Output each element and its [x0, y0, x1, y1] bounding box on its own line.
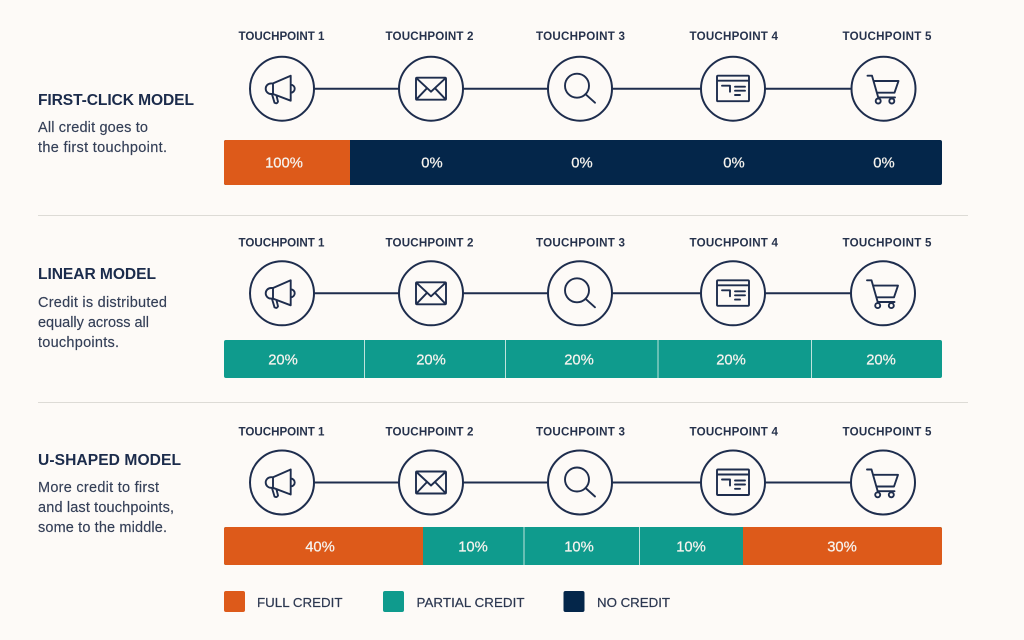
icon: megaphone — [250, 450, 314, 514]
touchpoint labels: TOUCHPOINT 3 — [536, 237, 626, 250]
legend item: partial credit: PARTIAL CREDIT — [416, 595, 524, 610]
icon: envelope — [399, 450, 463, 514]
credit bar: 40/10/10/10/30: 30% — [827, 540, 857, 556]
touchpoint timeline — [250, 57, 916, 121]
credit bar: 20% each: 20% — [416, 352, 446, 368]
touchpoint labels: TOUCHPOINT 3 — [536, 426, 626, 439]
icon: magnifying glass — [548, 261, 612, 325]
credit bar: 20% each — [224, 340, 942, 378]
description: first-click model: the first touchpoint. — [38, 140, 167, 156]
icon: envelope — [399, 57, 463, 121]
heading: u-shaped model: U-SHAPED MODEL — [38, 452, 181, 469]
touchpoint labels: TOUCHPOINT 5 — [842, 237, 932, 250]
touchpoint labels — [238, 30, 932, 43]
credit bar: 100% first touchpoint: 0% — [723, 156, 745, 172]
panel: linear model — [38, 237, 942, 378]
description: first-click model — [38, 120, 167, 156]
description: u-shaped model — [38, 480, 174, 536]
legend item: partial credit — [383, 591, 524, 612]
description: linear model — [38, 295, 167, 351]
icon: shopping cart — [851, 261, 915, 325]
icon: shopping cart — [851, 450, 915, 514]
credit bar: 20% each: 20% — [268, 352, 298, 368]
touchpoint labels: TOUCHPOINT 3 — [536, 30, 626, 43]
panel: first-click model — [38, 30, 942, 185]
touchpoint timeline — [250, 261, 915, 325]
credit bar: 20% each: 20% — [866, 352, 896, 368]
legend item: no credit — [564, 591, 670, 612]
credit bar: 40/10/10/10/30: 10% — [676, 540, 706, 556]
touchpoint labels: TOUCHPOINT 4 — [690, 30, 779, 43]
touchpoint labels: TOUCHPOINT 2 — [386, 30, 474, 43]
legend item: no credit: NO CREDIT — [597, 595, 670, 610]
description: first-click model: All credit goes to — [38, 120, 148, 136]
touchpoint labels: TOUCHPOINT 1 — [238, 237, 325, 250]
legend item: full credit — [224, 591, 342, 612]
credit bar: 40/10/10/10/30: 10% — [564, 540, 594, 556]
credit bar: 20% each: 20% — [716, 352, 746, 368]
credit bar: 100% first touchpoint — [224, 140, 942, 185]
legend — [224, 591, 670, 612]
credit bar: 100% first touchpoint: 0% — [873, 156, 895, 172]
credit bar: 40/10/10/10/30: 40% — [305, 540, 335, 556]
touchpoint labels: TOUCHPOINT 5 — [842, 30, 932, 43]
credit bar: 100% first touchpoint: 0% — [571, 156, 593, 172]
icon: browser window — [701, 261, 765, 325]
icon: browser window — [701, 450, 765, 514]
icon: megaphone — [250, 261, 314, 325]
credit bar: 100% first touchpoint: 0% — [421, 156, 443, 172]
icon: megaphone — [250, 57, 314, 121]
credit bar: 100% first touchpoint: 100% — [265, 156, 303, 172]
heading: linear model: LINEAR MODEL — [38, 266, 156, 283]
touchpoint labels: TOUCHPOINT 5 — [842, 426, 932, 439]
touchpoint labels: TOUCHPOINT 4 — [690, 426, 779, 439]
touchpoint labels: TOUCHPOINT 1 — [238, 30, 325, 43]
legend item: full credit: FULL CREDIT — [257, 595, 342, 610]
description: linear model: Credit is distributed — [38, 295, 167, 311]
panel: u-shaped model — [38, 426, 942, 565]
description: linear model: touchpoints. — [38, 335, 119, 351]
credit bar: 20% each: 20% — [564, 352, 594, 368]
description: u-shaped model: some to the middle. — [38, 520, 167, 536]
icon: magnifying glass — [548, 450, 612, 514]
icon: envelope — [399, 261, 463, 325]
credit bar: 40/10/10/10/30: 10% — [458, 540, 488, 556]
icon: shopping cart — [852, 57, 916, 121]
icon: magnifying glass — [548, 57, 612, 121]
description: linear model: equally across all — [38, 315, 149, 331]
touchpoint labels: TOUCHPOINT 2 — [386, 426, 474, 439]
credit bar: 40/10/10/10/30 — [224, 527, 942, 565]
touchpoint labels — [238, 426, 932, 439]
description: u-shaped model: More credit to first — [38, 480, 159, 496]
touchpoint labels — [238, 237, 932, 250]
heading: first-click model: FIRST-CLICK MODEL — [38, 92, 194, 109]
touchpoint labels: TOUCHPOINT 1 — [238, 426, 325, 439]
touchpoint timeline — [250, 450, 915, 514]
touchpoint labels: TOUCHPOINT 4 — [690, 237, 779, 250]
icon: browser window — [701, 57, 765, 121]
touchpoint labels: TOUCHPOINT 2 — [386, 237, 474, 250]
description: u-shaped model: and last touchpoints, — [38, 500, 174, 516]
